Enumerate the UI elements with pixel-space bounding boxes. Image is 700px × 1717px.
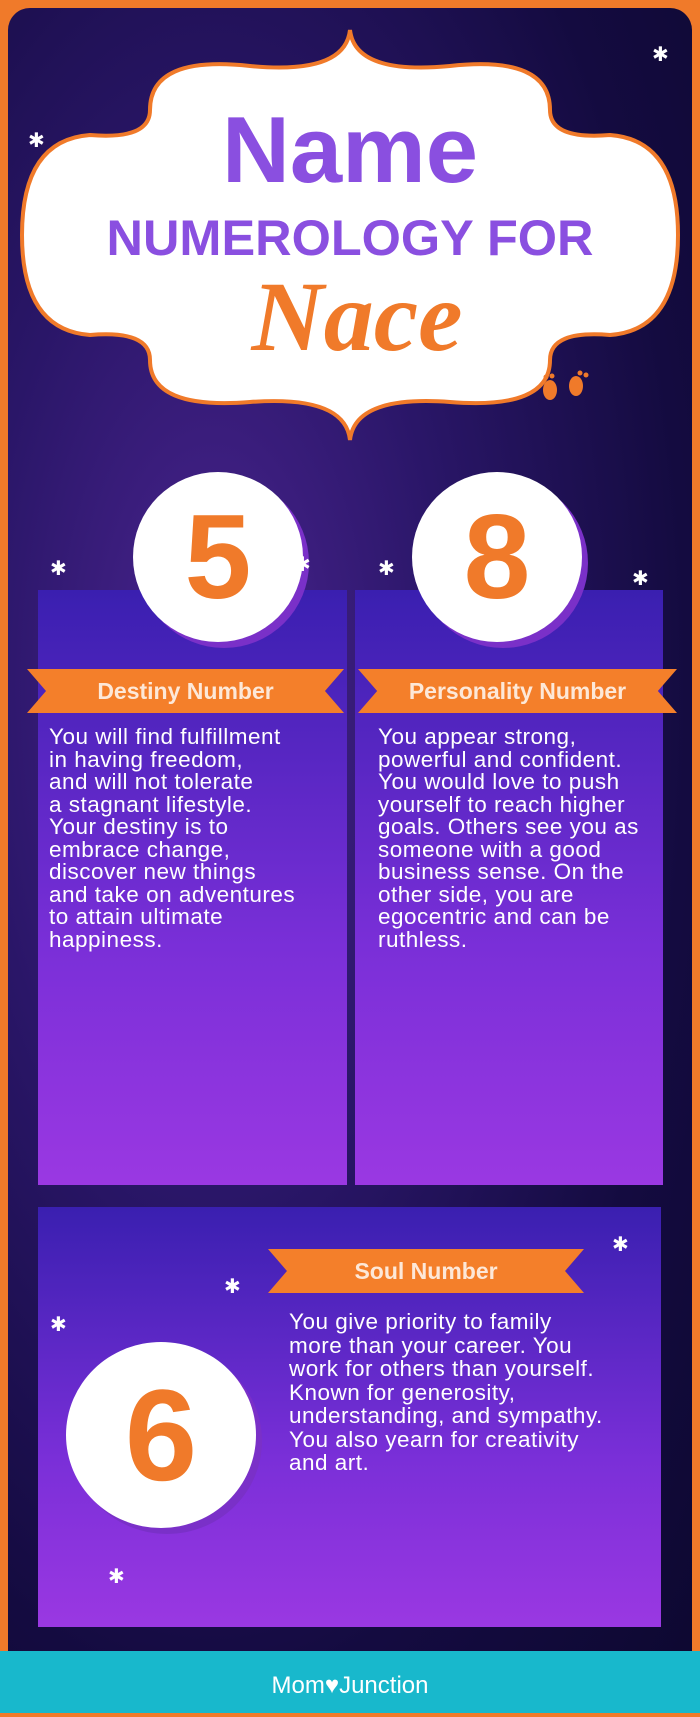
text: personality: other side, you are [378, 882, 574, 906]
text: soul: You also yearn for creativity [289, 1426, 579, 1452]
ribbon: soul number: Soul Number [354, 1258, 498, 1284]
text: soul: and art. [289, 1450, 369, 1475]
text: ✱ [224, 1276, 241, 1298]
ribbon: destiny number [27, 669, 344, 713]
title frame [20, 30, 680, 440]
text: personality: You appear strong, [378, 724, 576, 749]
footer [0, 1651, 700, 1713]
title: Name: Name [222, 97, 478, 202]
text: ✱ [294, 554, 311, 576]
text: ✱ [632, 568, 649, 590]
text: personality: goals. Others see you as [378, 814, 639, 839]
text: destiny: to attain ultimate [49, 904, 223, 929]
text: destiny: Your destiny is to [49, 814, 229, 839]
text: destiny: in having freedom, [49, 746, 243, 772]
ribbon: destiny number: Destiny Number [97, 678, 274, 704]
text: ✱ [612, 1234, 629, 1256]
text: personality: egocentric and can be [378, 904, 610, 929]
text: personality: ruthless. [378, 926, 468, 952]
text: personality: powerful and confident. [378, 746, 622, 772]
footer: Mom♥Junction [272, 1672, 428, 1699]
ribbon: personality number [358, 669, 677, 713]
text: soul: You give priority to family [289, 1309, 552, 1334]
ribbon: personality number: Personality Number [409, 678, 626, 704]
text: destiny: You will find fulfillment [49, 724, 281, 749]
panel: destiny [38, 590, 347, 1185]
title: numerology for: NUMEROLOGY FOR [106, 210, 594, 266]
text: ✱ [108, 1566, 125, 1588]
text: destiny: embrace change, [49, 836, 230, 862]
text: destiny [49, 724, 295, 952]
title: Nace: Nace [250, 261, 462, 372]
icon: footprints [543, 370, 588, 400]
text: soul: Known for generosity, [289, 1380, 515, 1404]
circle: 8 [412, 472, 582, 642]
text: personality [378, 724, 639, 952]
circle: 6: 6 [125, 1362, 197, 1508]
text: ✱ [652, 44, 669, 66]
text: ✱ [28, 130, 45, 152]
text: personality: You would love to push [378, 769, 620, 794]
text: soul: more than your career. You [289, 1332, 572, 1358]
text: destiny: and will not tolerate [49, 769, 253, 794]
ribbon: soul number [268, 1249, 584, 1293]
text: soul: work for others than yourself. [289, 1356, 594, 1381]
circle: 6 [66, 1342, 256, 1528]
circle: 5 [133, 472, 303, 642]
text: ✱ [378, 558, 395, 580]
text: destiny: a stagnant lifestyle. [49, 792, 252, 816]
text: destiny: happiness. [49, 926, 163, 952]
text: soul [289, 1309, 603, 1475]
text: soul: understanding, and sympathy. [289, 1403, 603, 1428]
circle: 5: 5 [185, 490, 251, 624]
text: personality: business sense. On the [378, 859, 624, 884]
text: destiny: and take on adventures [49, 882, 295, 906]
panel: personality [355, 590, 663, 1185]
text: personality: someone with a good [378, 836, 601, 862]
text: destiny: discover new things [49, 859, 256, 884]
text: personality: yourself to reach higher [378, 792, 625, 816]
text: ✱ [50, 558, 67, 580]
circle: 8: 8 [464, 490, 530, 624]
panel: soul [38, 1207, 661, 1627]
text: ✱ [50, 1314, 67, 1336]
